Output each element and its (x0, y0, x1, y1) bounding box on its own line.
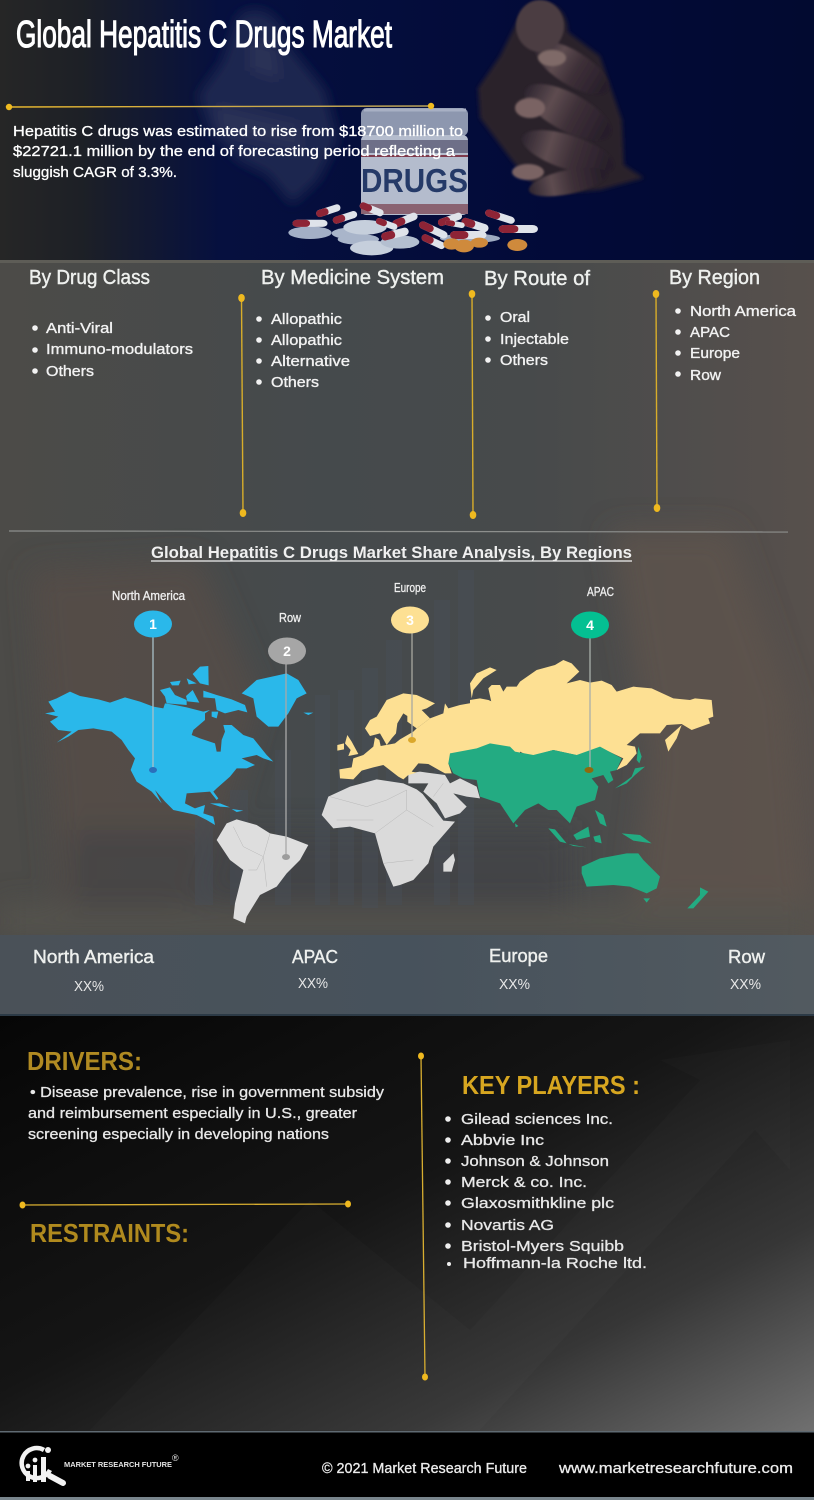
icon: market research future logo (22, 1447, 63, 1483)
region: Russia (470, 660, 713, 770)
section: by medicine system (256, 267, 444, 391)
panel: regional shares band: Europe (489, 946, 548, 966)
text block: drivers: screening especially in developing nations (28, 1126, 329, 1143)
text: website: www.marketresearchfuture.com (558, 1460, 793, 1477)
panel: regional shares band: North America (33, 947, 155, 967)
section: by route of: Oral (500, 309, 530, 326)
image: left hand in shadow (198, 10, 338, 204)
world map (45, 660, 713, 923)
section: by drug class: By Drug Class (29, 267, 150, 289)
section: by medicine system: Allopathic (271, 332, 343, 349)
section: by route of: Injectable (500, 331, 569, 348)
panel: hero banner (0, 0, 814, 260)
list: key players (445, 1111, 647, 1272)
region: Europe (337, 693, 520, 779)
text: brand name: MARKET RESEARCH FUTURE (64, 1462, 172, 1469)
map pin 2: Row: 2 (283, 643, 291, 659)
map pin 1: North America (112, 588, 186, 773)
section: by medicine system: Allopathic (271, 311, 343, 328)
heading: restraints: RESTRAINTS: (30, 1218, 189, 1248)
region: Asia Pacific (448, 743, 708, 908)
heading: map section title: Global Hepatitis C Drugs Market Share Analysis, By Regions (151, 543, 632, 562)
panel: regional shares band: XX% (730, 976, 761, 993)
heading: key players: KEY PLAYERS : (462, 1070, 640, 1100)
text block: market summary: Hepatitis C drugs was estimated to rise from $18700 million to (13, 123, 463, 140)
text block: drivers: • Disease prevalence, rise in government subsidy (30, 1084, 385, 1101)
map pin 1: North America: 1 (149, 616, 157, 632)
title: Global Hepatitis C Drugs Market (16, 14, 392, 56)
divider: vertical gold line (418, 1052, 428, 1380)
map pin 1: North America: North America (112, 588, 186, 603)
panel: regional shares band: XX% (499, 976, 530, 993)
text block: drivers (28, 1084, 385, 1143)
section: by route of (484, 268, 590, 369)
list: key players: Abbvie Inc (461, 1132, 545, 1149)
panel: drivers, restraints and key players (0, 1014, 814, 1432)
panel: market segments and map background (0, 260, 814, 1014)
dividers: vertical gold lines (238, 290, 660, 519)
section: by drug class (29, 267, 193, 380)
image: right hand (478, 0, 644, 202)
list: key players: Johnson & Johnson (461, 1153, 609, 1170)
map pin 3: Europe: Europe (394, 580, 426, 595)
region: South America (217, 819, 308, 923)
map pin 4: APAC: 4 (586, 617, 594, 633)
section: by medicine system: By Medicine System (261, 267, 444, 289)
section: by medicine system: Alternative (271, 353, 350, 370)
section: by drug class: Others (46, 363, 94, 380)
section: by route of: Others (500, 352, 548, 369)
region: North America (45, 666, 313, 825)
list: key players: Merck & co. Inc. (461, 1174, 587, 1191)
text block: market summary: sluggish CAGR of 3.3%. (13, 164, 177, 181)
text: copyright: © 2021 Market Research Future (322, 1460, 527, 1477)
panel: regional shares band: APAC (292, 947, 338, 967)
section: by region: APAC (690, 324, 730, 341)
panel: regional shares band (0, 935, 814, 1014)
list: key players: Glaxosmithkline plc (461, 1195, 615, 1212)
section: by medicine system: Others (271, 374, 319, 391)
label: DRUGS: DRUGS (361, 162, 468, 199)
icon: registered mark: ® (172, 1453, 179, 1463)
section: by region: North America (690, 303, 797, 320)
panel: regional shares band: Row (728, 947, 766, 967)
panel: regional shares band: XX% (298, 975, 328, 992)
section: by drug class: Anti-Viral (46, 320, 113, 337)
section: by route of: By Route of (484, 268, 590, 290)
map pin 4: APAC: APAC (587, 584, 614, 599)
list: key players: Novartis AG (461, 1217, 554, 1234)
section: by region: By Region (669, 267, 760, 289)
footer (0, 1431, 814, 1500)
map pin 3: Europe: 3 (406, 612, 414, 628)
text block: market summary: $22721.1 million by the end of forecasting period reflecting a (13, 143, 456, 160)
list: key players: Gilead sciences Inc. (461, 1111, 613, 1128)
list: key players: Hoffmann-la Roche ltd. (463, 1255, 647, 1272)
map pin 2: Row (268, 610, 306, 860)
section: by region: Row (690, 367, 721, 384)
divider: gold line (6, 103, 434, 110)
region: Africa and Middle East (322, 772, 480, 887)
map pin 2: Row: Row (279, 610, 302, 625)
divider: gold line (20, 1200, 351, 1208)
text block: market summary (13, 123, 463, 181)
section: by region: Europe (690, 345, 740, 362)
map pin 4: APAC (571, 584, 614, 773)
image: pile of pills (288, 201, 538, 255)
image: drug bottle (361, 108, 468, 215)
panel: regional shares band: XX% (74, 978, 104, 995)
heading: drivers: DRIVERS: (27, 1046, 142, 1076)
section: by region (669, 267, 797, 384)
section: by drug class: Immuno-modulators (46, 341, 193, 358)
list: key players: Bristol-Myers Squibb (461, 1238, 624, 1255)
image: blurred hand and chart backdrop (0, 530, 814, 937)
text block: drivers: and reimbursement especially in U.S., greater (28, 1105, 357, 1122)
map pin 3: Europe (391, 580, 429, 743)
